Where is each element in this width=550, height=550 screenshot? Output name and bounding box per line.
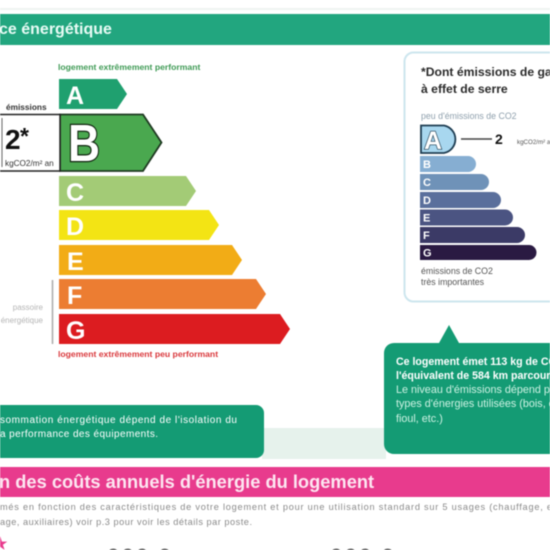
top faint divider — [0, 8, 550, 10]
heading band: annual energy costs — [0, 467, 550, 497]
cost explanation text: age, auxiliaires) voir p.3 pour voir les détails par poste. — [0, 517, 252, 527]
energy class F: F — [67, 282, 82, 310]
panel: greenhouse gas emissions — [404, 52, 550, 302]
energy class E: E — [67, 248, 84, 276]
energy class A: A — [66, 82, 84, 110]
class F bar: F — [423, 230, 430, 242]
energy class A — [59, 79, 127, 110]
class D bar: D — [423, 195, 431, 207]
scale bottom label: émissions de CO2 — [421, 266, 493, 276]
passoire énergétique label — [1, 280, 52, 344]
class A badge — [421, 126, 455, 155]
class E bar: E — [423, 212, 430, 224]
class G bar: G — [423, 248, 432, 260]
callout: energy consumption: a performance des équipements. — [0, 429, 158, 440]
energy class C: C — [66, 179, 84, 207]
callout: energy consumption — [0, 405, 264, 458]
class B bar: B — [423, 159, 431, 171]
connector line and value: 2 — [495, 131, 503, 147]
class B bar — [420, 156, 476, 172]
heading band: annual energy costs: n des coûts annuels d'énergie du logement — [0, 471, 374, 492]
cost explanation text — [0, 502, 550, 527]
panel heading: à effet de serre — [421, 82, 508, 96]
heading band: performance énergétique: ce énergétique — [0, 21, 112, 38]
energy class B, highlighted: B — [68, 115, 100, 173]
pale band behind callouts — [262, 428, 386, 459]
callout: emissions equivalence: fioul, etc.) — [396, 413, 443, 425]
cost explanation text: més en fonction des caractéristiques de votre logement et pour une utilisation standard sur 5 usages (chauffage, e — [0, 502, 550, 512]
callout: emissions equivalence — [384, 325, 550, 454]
class G bar — [420, 245, 537, 260]
label: top of energy scale: logement extrêmement performant — [58, 62, 200, 72]
emissions value box: * — [20, 123, 29, 149]
class E bar — [420, 210, 513, 226]
scale top label: peu d'émissions de CO2 — [421, 111, 517, 121]
class F bar — [420, 227, 525, 243]
energy class G — [59, 314, 290, 345]
energy class D — [59, 210, 219, 241]
label: bottom of energy scale: logement extrêmement peu performant — [58, 349, 218, 359]
callout: energy consumption: sommation énergétique dépend de l'isolation du — [0, 415, 237, 426]
energy rating scale — [58, 62, 290, 359]
class C bar — [420, 174, 489, 190]
energy class B, highlighted — [60, 114, 162, 173]
class D bar — [420, 192, 501, 208]
energy class F — [59, 279, 266, 310]
connector line and value — [461, 131, 550, 147]
energy class E — [59, 245, 242, 276]
energy class D: D — [66, 213, 84, 241]
heading band: performance énergétique — [0, 14, 550, 45]
emissions value box — [0, 102, 60, 171]
emissions value box: kgCO2/m² an — [5, 159, 54, 168]
scale bottom label: très importantes — [421, 277, 485, 287]
emissions value box: émissions — [6, 102, 47, 112]
class C bar: C — [423, 177, 431, 189]
passoire énergétique label: passoire — [13, 303, 44, 312]
energy class C — [59, 176, 196, 207]
passoire énergétique label: énergétique — [1, 316, 44, 325]
emissions value box: 2 — [5, 124, 21, 155]
class A badge: A — [424, 127, 442, 155]
energy class G: G — [66, 317, 85, 345]
